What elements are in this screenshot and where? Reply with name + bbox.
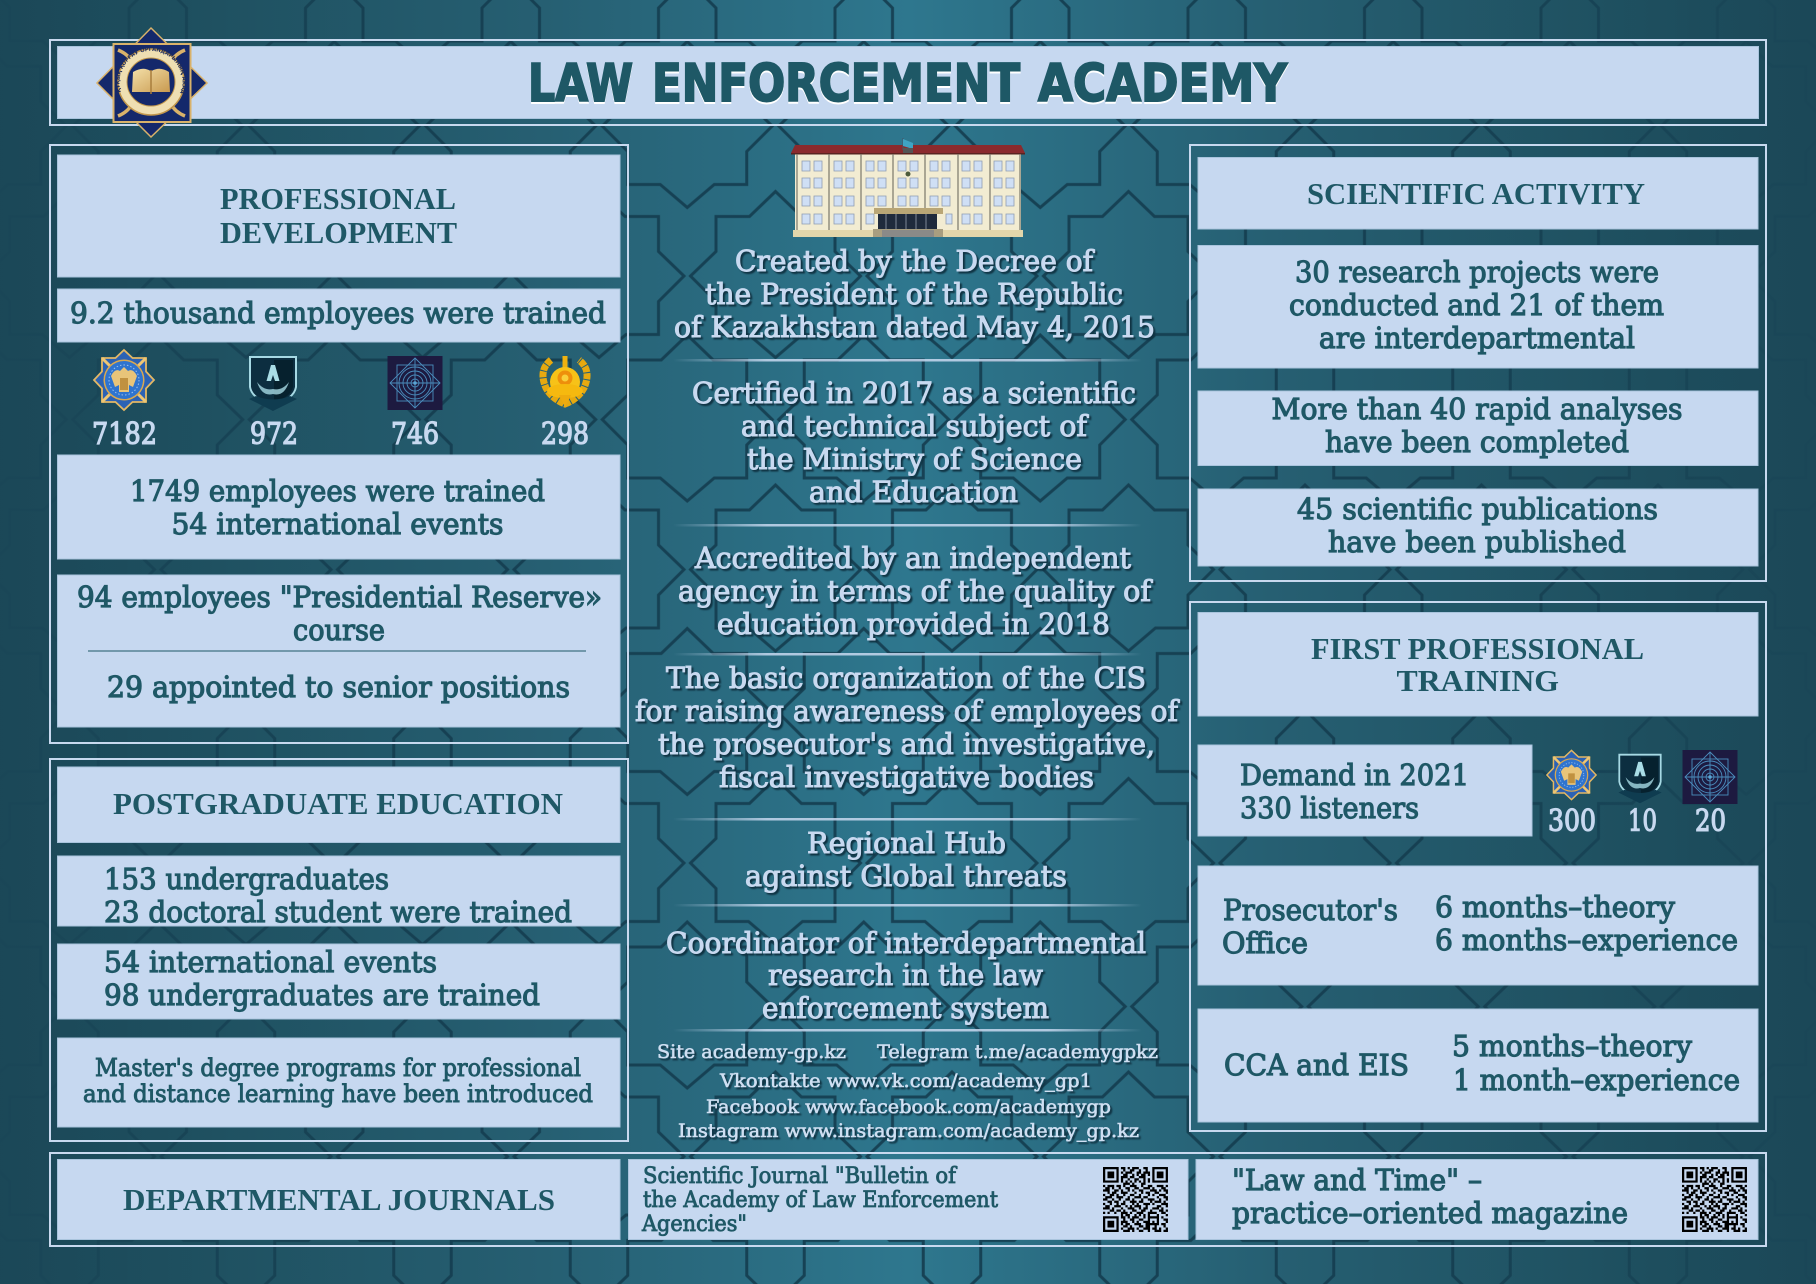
statement: decree: Created by the Decree of	[735, 244, 1095, 278]
heading: scientific activity: SCIENTIFIC ACTIVITY	[1307, 176, 1645, 211]
statement: basic organization: for raising awareness of employees of	[635, 694, 1180, 728]
statement: coordinator: enforcement system	[762, 991, 1049, 1025]
heading: first professional training: FIRST PROFESSIONAL	[1311, 631, 1644, 666]
stat: research projects: conducted and 21 of them	[1289, 288, 1664, 322]
statement: regional hub: Regional Hub	[807, 826, 1006, 860]
statement: decree: the President of the Republic	[705, 277, 1123, 311]
statement: certified: and Education	[809, 475, 1018, 509]
stat: international training: 54 international events	[172, 507, 504, 541]
stat: cca and eis: 5 months–theory	[1452, 1029, 1693, 1063]
icon: medal 300	[1547, 750, 1596, 839]
stat: cca and eis	[1198, 1009, 1758, 1122]
contact links: Site academy-gp.kz	[657, 1041, 846, 1063]
statement: accredited	[678, 541, 1153, 641]
statement: accredited: education provided in 2018	[717, 607, 1110, 641]
heading: postgraduate education: POSTGRADUATE EDUCATION	[113, 786, 563, 821]
stat: research projects	[1198, 246, 1758, 368]
icon: gold emblem 298	[541, 356, 589, 452]
journal: bulletin	[628, 1160, 1188, 1240]
statement: basic organization	[635, 661, 1180, 794]
contact links: Instagram www.instagram.com/academy_gp.kz	[678, 1120, 1139, 1142]
stat: international events: 54 international events	[104, 945, 437, 979]
statement: decree: of Kazakhstan dated May 4, 2015	[674, 310, 1155, 344]
statement: certified: the Ministry of Science	[747, 442, 1082, 476]
journal: bulletin: the Academy of Law Enforcement	[643, 1187, 998, 1213]
stat: publications: have been published	[1328, 525, 1626, 559]
statement: accredited: agency in terms of the quality of	[678, 574, 1153, 608]
panel: professional development	[50, 145, 628, 743]
icon: gold emblem 298: 298	[541, 417, 589, 452]
journal: bulletin: Scientific Journal "Bulletin of	[643, 1163, 958, 1189]
icon: medal 7182: 7182	[92, 417, 157, 452]
stat: prosecutor's office: 6 months–theory	[1435, 890, 1676, 924]
statement: coordinator: research in the law	[768, 958, 1043, 992]
title: LAW	[528, 54, 633, 114]
heading: departmental journals	[58, 1160, 620, 1240]
stat: presidential reserve	[58, 575, 620, 727]
icon: target 20	[1682, 750, 1738, 839]
header banner	[50, 40, 1766, 125]
icon: shield 10: 10	[1628, 804, 1657, 839]
stat: demand: 330 listeners	[1240, 791, 1419, 825]
stat: prosecutor's office	[1198, 866, 1758, 985]
stat: cca and eis: 1 month–experience	[1453, 1063, 1740, 1097]
stat: demand	[1198, 745, 1532, 836]
icon: academy logo	[96, 27, 208, 138]
stat: international training	[58, 455, 620, 559]
statement: certified	[692, 376, 1136, 509]
contact links: Telegram t.me/academygpkz	[877, 1041, 1158, 1063]
journal: law and time: "Law and Time" –	[1232, 1163, 1482, 1197]
statement: regional hub	[745, 826, 1067, 893]
icon: academy building	[791, 138, 1025, 237]
title	[528, 54, 1288, 114]
heading: first professional training	[1198, 612, 1758, 716]
stat: publications	[1198, 489, 1758, 566]
heading: postgraduate education	[58, 767, 620, 842]
text: masters programs	[58, 1038, 620, 1127]
stat: international training: 1749 employees were trained	[130, 474, 545, 508]
title: ACADEMY	[1038, 54, 1288, 114]
statement: certified: and technical subject of	[741, 409, 1089, 443]
heading: scientific activity	[1198, 158, 1758, 229]
journal: law and time	[1196, 1160, 1758, 1240]
title: ENFORCEMENT	[652, 54, 1020, 114]
panel: first professional training	[1190, 602, 1766, 1131]
stat: rapid analyses: have been completed	[1325, 425, 1629, 459]
icon: target 20: 20	[1695, 804, 1726, 839]
windows	[802, 161, 1014, 224]
icon: medal 300: 300	[1548, 804, 1596, 839]
icon: medal 7182	[92, 350, 157, 452]
panel: departmental journals	[50, 1153, 1766, 1246]
heading: professional development: DEVELOPMENT	[220, 215, 457, 250]
stat: prosecutor's office: 6 months–experience	[1435, 923, 1738, 957]
text: masters programs: and distance learning have been introduced	[83, 1079, 593, 1108]
stat: undergraduates and doctoral	[58, 856, 620, 929]
statement: accredited: Accredited by an independent	[694, 541, 1131, 575]
contact links	[657, 1041, 1158, 1142]
icon: shield 10	[1618, 755, 1662, 839]
statement: coordinator: Coordinator of interdepartmental	[666, 926, 1146, 960]
heading: professional development: PROFESSIONAL	[220, 181, 456, 216]
qr code	[1103, 1167, 1168, 1232]
stat: cca and eis: CCA and EIS	[1224, 1048, 1409, 1082]
icon: target 746	[388, 356, 442, 452]
statement: basic organization: the prosecutor's and investigative,	[658, 727, 1155, 761]
statement: basic organization: The basic organization of the CIS	[666, 661, 1146, 695]
stat: presidential reserve: 94 employees "Presidential Reserve»	[77, 580, 602, 614]
stat: prosecutor's office: Office	[1222, 926, 1308, 960]
journal: law and time: practice–oriented magazine	[1232, 1196, 1628, 1230]
stat: undergraduates and doctoral: 153 undergraduates	[104, 862, 389, 896]
icon: target 746: 746	[391, 417, 439, 452]
stat: presidential reserve: 29 appointed to senior positions	[107, 670, 570, 704]
text block: centre column statements	[635, 244, 1180, 1142]
stat: research projects: are interdepartmental	[1319, 321, 1635, 355]
stat: prosecutor's office: Prosecutor's	[1223, 893, 1398, 927]
stat: presidential reserve: course	[293, 613, 385, 647]
stat: demand: Demand in 2021	[1240, 758, 1469, 792]
statement: coordinator	[666, 926, 1146, 1025]
text: masters programs: Master's degree programs for professional	[95, 1053, 581, 1082]
heading: departmental journals: DEPARTMENTAL JOURNALS	[123, 1182, 555, 1217]
statement: decree	[674, 244, 1155, 344]
icon: shield 972: 972	[250, 417, 298, 452]
statement: regional hub: against Global threats	[745, 859, 1067, 893]
stat: employees trained: 9.2 thousand employees were trained	[70, 296, 606, 330]
journal: bulletin: Agencies"	[641, 1211, 747, 1237]
stat: international events	[58, 944, 620, 1019]
stat: employees trained	[58, 289, 620, 342]
statement: basic organization: fiscal investigative bodies	[719, 760, 1094, 794]
stat: undergraduates and doctoral: 23 doctoral student were trained	[104, 895, 572, 929]
stat: rapid analyses: More than 40 rapid analyses	[1272, 392, 1682, 426]
panel: postgraduate education	[50, 759, 628, 1141]
stat: rapid analyses	[1198, 391, 1758, 466]
statement: certified: Certified in 2017 as a scientific	[692, 376, 1136, 410]
heading: professional development	[58, 155, 620, 277]
icon: shield 972	[249, 357, 298, 452]
stat: research projects: 30 research projects were	[1295, 255, 1659, 289]
contact links: Facebook www.facebook.com/academygp	[706, 1096, 1111, 1118]
stat: international events: 98 undergraduates are trained	[104, 978, 540, 1012]
qr code	[1682, 1167, 1747, 1232]
heading: first professional training: TRAINING	[1396, 663, 1559, 698]
stat: publications: 45 scientific publications	[1297, 492, 1658, 526]
panel: scientific activity	[1190, 145, 1766, 581]
contact links: Vkontakte www.vk.com/academy_gp1	[719, 1070, 1092, 1092]
